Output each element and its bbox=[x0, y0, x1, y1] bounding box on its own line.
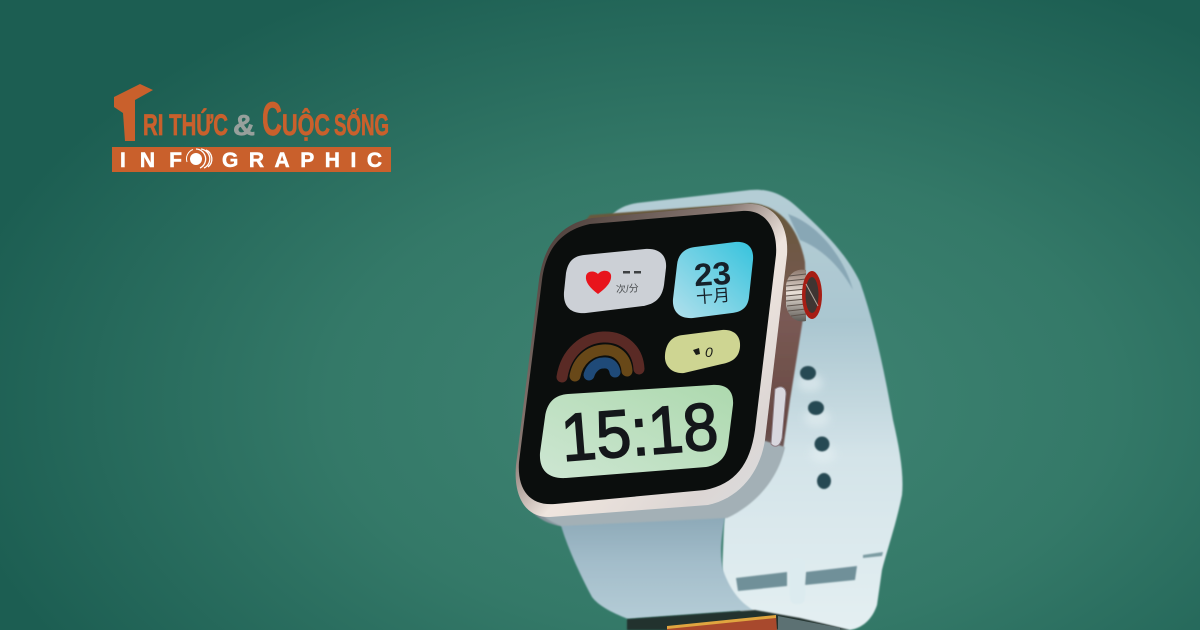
logo wordmark: UỘC bbox=[282, 108, 330, 142]
heart rate unit: 次/分 bbox=[616, 281, 639, 296]
metal rim bbox=[516, 204, 787, 517]
logo wordmark bbox=[143, 92, 389, 145]
logo text: infographic: INF bbox=[120, 149, 182, 172]
logo text: infographic bbox=[120, 149, 382, 172]
tile: heart rate bbox=[564, 249, 666, 313]
tile: rainbow bbox=[562, 337, 639, 377]
logo icon: roof-shaped T bbox=[114, 84, 153, 141]
strap inner shadow bbox=[788, 214, 853, 290]
tile: date bbox=[673, 242, 753, 318]
logo: Tri Thức & Cuộc Sống Infographic bbox=[112, 84, 391, 172]
front lower strap bbox=[560, 508, 753, 619]
strap buckle slot bbox=[736, 552, 883, 604]
date month: 十月 bbox=[695, 286, 731, 307]
case lower shoulder bbox=[538, 440, 785, 526]
logo wordmark: & bbox=[233, 110, 255, 142]
steps icon bbox=[693, 348, 700, 355]
logo orange band bbox=[112, 147, 391, 172]
logo icon: concentric circle O bbox=[186, 149, 212, 168]
side button bbox=[771, 387, 786, 446]
strap holes bbox=[800, 366, 831, 489]
stand gold-red block bbox=[667, 616, 777, 630]
strap hole halos bbox=[797, 374, 836, 463]
digital crown bbox=[786, 270, 822, 321]
stand glass edge bbox=[778, 616, 840, 630]
display stand bbox=[627, 610, 850, 630]
logo wordmark: C bbox=[262, 92, 282, 145]
date day number: 23 bbox=[693, 255, 732, 293]
crown red cap bbox=[802, 271, 822, 319]
heart icon bbox=[586, 271, 611, 294]
tile: steps pill bbox=[665, 330, 740, 373]
back strap loop bbox=[610, 190, 903, 630]
clock digits: 15:18 bbox=[558, 389, 721, 476]
logo wordmark: SỐNG bbox=[334, 108, 389, 142]
tile: clock time bbox=[540, 385, 733, 478]
steps value: 0 bbox=[705, 344, 713, 360]
logo wordmark: RI THỨC bbox=[143, 108, 228, 142]
watch case body bbox=[520, 203, 806, 526]
crown knurled ring bbox=[786, 270, 806, 321]
logo text: infographic: GRAPHIC bbox=[222, 149, 382, 172]
black screen bbox=[519, 211, 776, 504]
smartwatch photo illustration bbox=[516, 190, 903, 630]
heart rate placeholder bbox=[623, 271, 641, 274]
